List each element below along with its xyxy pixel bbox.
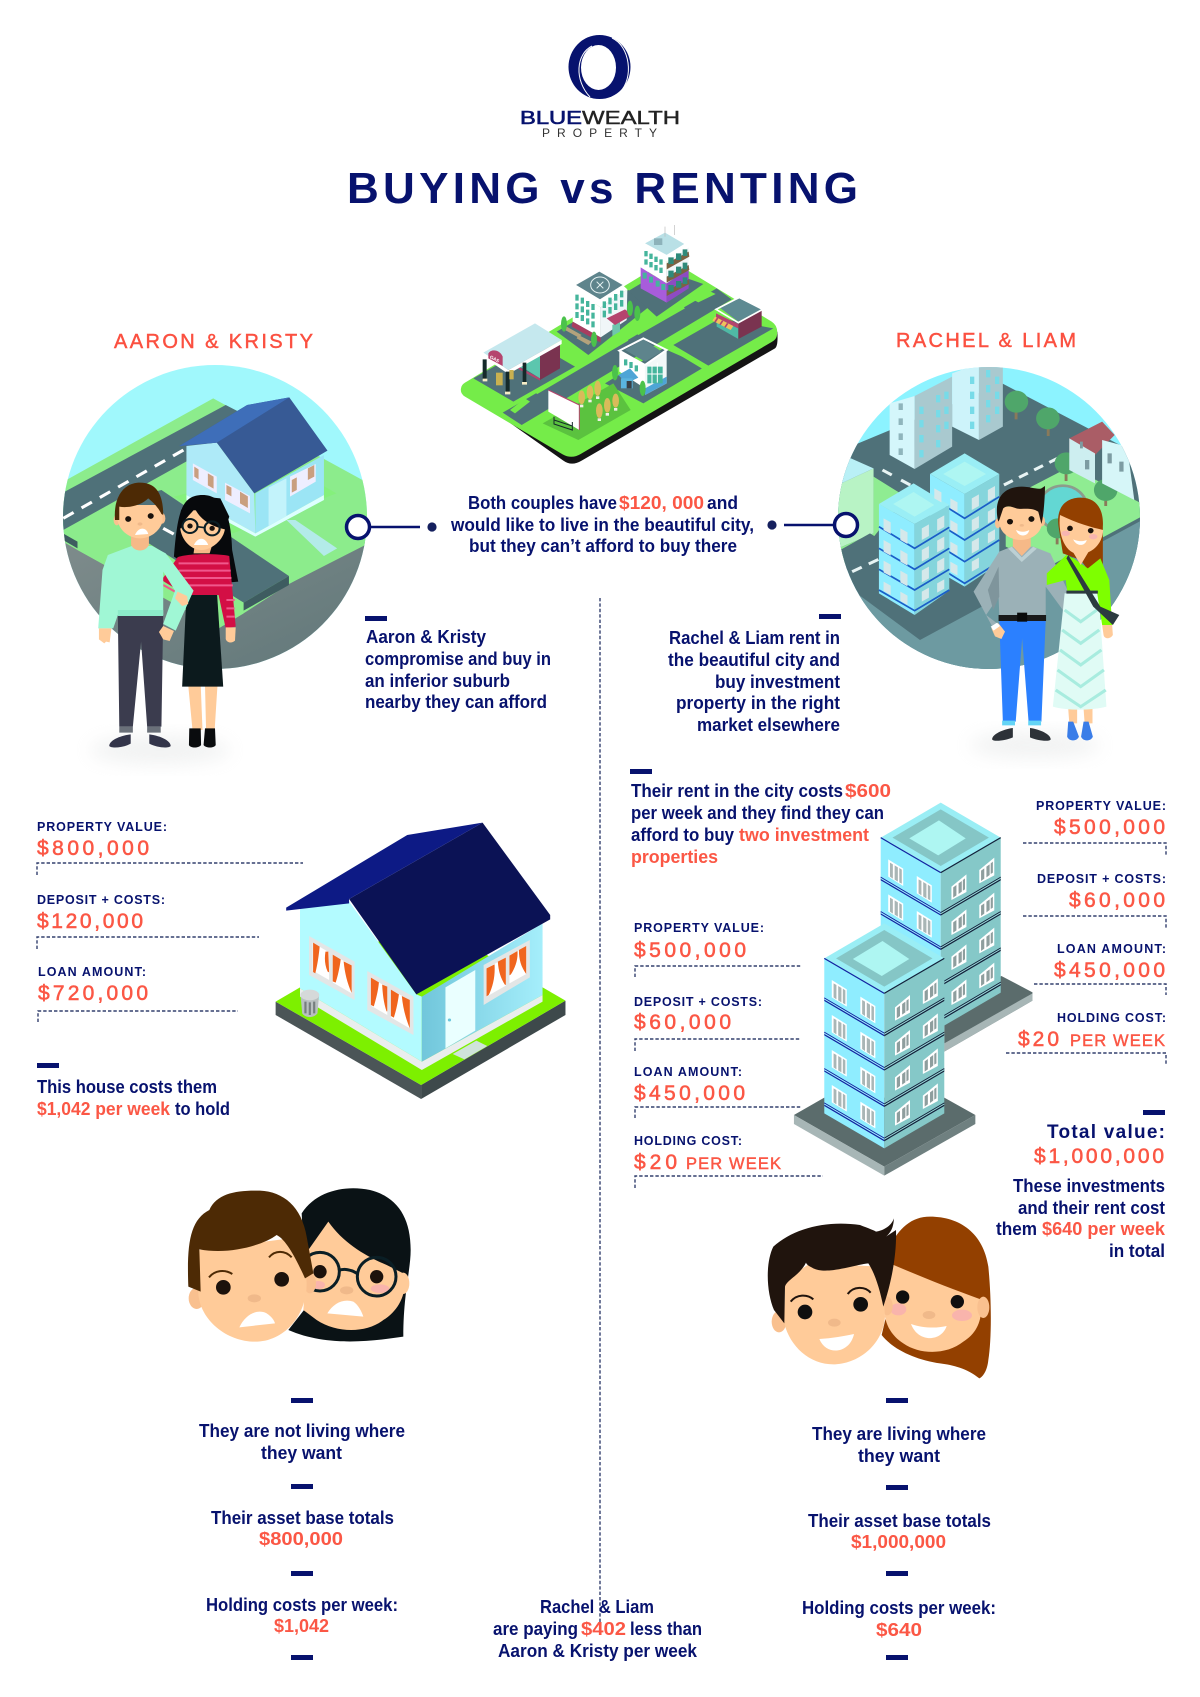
connector: intro text to right circle [767,514,858,536]
asset base: Their asset base totals [211,1508,394,1528]
logo wordmark: PROPERTY [542,126,657,140]
logo wordmark: BLUE [520,108,582,128]
text: rent in the city: afford to buy [631,825,734,845]
text: Rachel & Liam rent: property in the right [676,693,840,713]
stats: second investment [1006,799,1166,1064]
asset base [808,1511,991,1552]
asset base: $800,000 [259,1529,343,1549]
illustration: isometric city [461,225,778,464]
text: house holding cost: to hold [175,1099,230,1119]
holding costs: Holding costs per week: [802,1598,996,1618]
intro text: but they can’t afford to buy there [469,536,737,556]
holding cost: $20 [634,1151,677,1174]
block buildings [930,474,965,587]
intro text: $120, 000 [619,493,704,513]
illustration: Aaron & Kristy suburb circle [63,365,367,762]
Aaron face [188,1191,316,1342]
intro text: Both couples have [468,493,617,513]
suburb scene [63,365,367,669]
text: investment and rent cost: them [996,1219,1037,1239]
comparison conclusion: Aaron & Kristy per week [498,1641,698,1661]
ground shadow under couple [970,732,1100,758]
connector: left circle to intro text [346,516,437,538]
living where they want: They are living where [812,1424,986,1444]
deposit and costs [634,995,801,1051]
not living where they want: They are not living where [199,1421,405,1441]
trees [561,301,646,421]
illustration: worried faces [188,1188,411,1342]
text: Rachel & Liam rent [668,614,841,735]
back tower [881,803,1001,1028]
holding cost: HOLDING COST: [634,1134,742,1148]
property value: PROPERTY VALUE: [1036,799,1166,813]
loan amount [1034,942,1166,995]
heading: Aaron & Kristy: AARON & KRISTY [114,331,313,353]
total value: $1,000,000 [1034,1145,1164,1168]
heading: Rachel & Liam: RACHEL & LIAM [896,330,1076,352]
logo wordmark: WEALTH [582,108,680,128]
towers [890,396,915,469]
comparison conclusion: Rachel & Liam [540,1597,654,1617]
text: Rachel & Liam rent: Rachel & Liam rent in [669,628,840,648]
loan amount: LOAN AMOUNT: [1057,942,1166,956]
logo wordmark [520,108,680,140]
holding cost [1006,1011,1166,1064]
text: Aaron & Kristy compromise: Aaron & Kristy [366,627,486,647]
property value: PROPERTY VALUE: [37,820,167,834]
property value [1023,799,1166,855]
property value [37,820,303,875]
deposit and costs: DEPOSIT + COSTS: [634,995,762,1009]
property value: $500,000 [634,939,746,962]
loan amount: LOAN AMOUNT: [38,965,146,979]
loan amount [38,965,238,1022]
asset base [211,1508,394,1549]
text: house holding cost: This house costs them [37,1077,217,1097]
intro text [450,493,754,556]
balcony building [641,225,689,303]
illustration: isometric house [276,823,565,1099]
text: investment and rent cost: and their rent cost [1018,1198,1165,1218]
living where they want [812,1424,986,1466]
title: BUYING vs RENTING [347,164,858,213]
trash can [300,990,319,1017]
gas station [483,323,562,394]
text: rent in the city: $600 [845,781,891,801]
deposit and costs: DEPOSIT + COSTS: [37,893,165,907]
text: rent in the city: per week and they find they can [631,803,884,823]
front tower [824,923,944,1148]
text: Aaron & Kristy compromise [365,616,551,712]
Liam face [768,1218,896,1364]
illustration: investment towers [794,803,1032,1176]
stats: first investment [634,921,823,1188]
Kristy face [288,1188,411,1341]
back slab [944,976,1032,1052]
holding cost [634,1134,823,1188]
holding cost: PER WEEK [686,1155,781,1173]
text: investment and rent cost: These investments [1013,1176,1165,1196]
holding cost: $20 [1018,1028,1059,1051]
holding costs [206,1595,398,1636]
text: house holding cost: $1,042 per week [37,1099,171,1119]
total value: Total value: [1047,1122,1165,1143]
text: Rachel & Liam rent: the beautiful city and [668,650,840,670]
Rachel face [882,1217,991,1378]
Liam [974,486,1068,741]
holding costs: Holding costs per week: [206,1595,398,1615]
text: rent in the city: two investment [739,825,869,845]
comparison conclusion: are paying [493,1619,578,1639]
comparison conclusion: less than [630,1619,702,1639]
deposit and costs [1023,872,1166,928]
figures: Aaron and Kristy [98,483,238,747]
text: Rachel & Liam rent: market elsewhere [697,715,840,735]
property value: $500,000 [1054,816,1165,839]
loan amount: $450,000 [1054,959,1165,982]
Kristy [161,495,238,747]
text: Aaron & Kristy compromise: compromise and buy in [365,649,551,669]
Rachel [1047,498,1119,740]
text: rent in the city: Their rent in the city costs [631,781,843,801]
asset base: $1,000,000 [851,1532,946,1552]
figures: Liam and Rachel [974,486,1119,741]
loan amount [634,1065,801,1118]
intro text: would like to live in the beautiful city, [450,515,754,535]
text: Rachel & Liam rent: buy investment [715,672,840,692]
logo: Blue Wealth Property [520,35,680,140]
front slab [794,1098,975,1176]
deposit and costs: $60,000 [1069,889,1165,912]
comparison conclusion [493,1597,702,1661]
billboard [548,390,579,430]
loan amount: $450,000 [634,1082,745,1105]
intro text: and [707,493,738,513]
deposit and costs: DEPOSIT + COSTS: [1037,872,1166,886]
living where they want: they want [858,1446,940,1466]
not living where they want [199,1421,405,1463]
text: investment and rent cost: $640 per week [1042,1219,1166,1239]
stats: Aaron & Kristy property [37,820,303,1022]
deposit and costs [37,893,259,949]
total value [1034,1110,1165,1168]
houses [1069,422,1115,455]
shop [712,297,763,339]
centre dotted divider [599,598,601,1628]
holding costs: $1,042 [274,1616,329,1636]
summary: Aaron & Kristy [199,1398,405,1660]
comparison conclusion: $402 [581,1619,626,1639]
logo mark [568,35,630,99]
text: Aaron & Kristy compromise: nearby they can afford [365,692,547,712]
property value: PROPERTY VALUE: [634,921,764,935]
windows [309,936,530,1035]
holding costs [802,1598,996,1640]
loan amount: $720,000 [38,982,148,1005]
summary: Rachel & Liam [802,1398,996,1660]
property value [634,921,801,977]
deposit and costs: $120,000 [37,910,143,933]
text: house holding cost [37,1063,230,1119]
gas station: GAS [489,354,500,364]
text: investment and rent cost: in total [1109,1241,1165,1261]
text: rent in the city [630,769,891,867]
Aaron [98,483,194,747]
holding cost: PER WEEK [1070,1032,1165,1050]
holding costs: $640 [876,1620,922,1640]
loan amount: LOAN AMOUNT: [634,1065,742,1079]
text: investment and rent cost [996,1176,1166,1261]
not living where they want: they want [261,1443,342,1463]
trees [1015,410,1107,544]
holding cost: HOLDING COST: [1057,1011,1166,1025]
ground shadow under couple [90,736,230,764]
deposit and costs: $60,000 [634,1011,731,1034]
roof [286,823,550,994]
illustration: happy faces [768,1217,991,1378]
illustration: Rachel & Liam city circle [834,363,1149,758]
roads and lots [473,270,773,440]
text: Aaron & Kristy compromise: an inferior suburb [365,671,510,691]
property value: $800,000 [37,837,149,860]
asset base: Their asset base totals [808,1511,991,1531]
white block [618,338,667,395]
text: rent in the city: properties [631,847,718,867]
city scene [834,363,1149,673]
office with helipad [565,272,632,345]
